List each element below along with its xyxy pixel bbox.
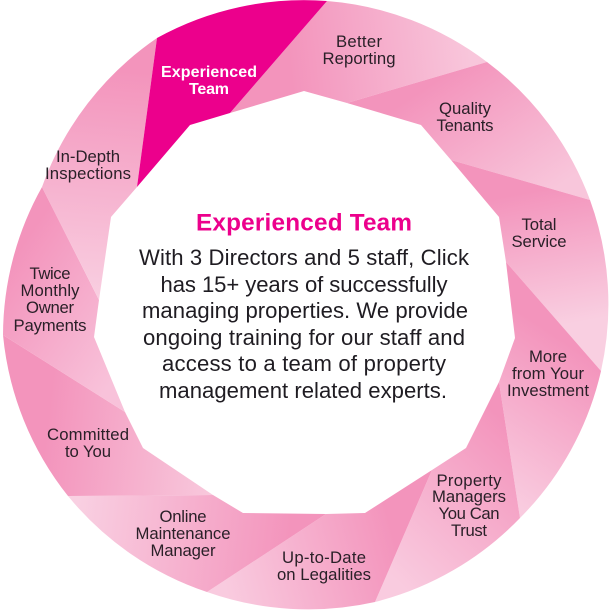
- label: More from Your Investment: from Your: [512, 364, 584, 383]
- label: Committed to You: Committed: [47, 425, 129, 444]
- segment: Up-to-Date on Legalities: [207, 470, 432, 609]
- segment: Better Reporting: [230, 1, 487, 113]
- segment: Twice Monthly Owner Payments: [3, 187, 125, 412]
- label: Twice Monthly Owner Payments: Owner: [26, 298, 74, 317]
- heading: Experienced Team: Experienced Team: [196, 210, 412, 236]
- label: Total Service: Service: [512, 232, 566, 251]
- label: Experienced Team: [161, 64, 257, 98]
- label: Online Maintenance Manager: Maintenance: [136, 524, 230, 543]
- body text: [139, 245, 470, 403]
- label: More from Your Investment: [507, 347, 589, 400]
- body text: has 15+ years of successfully: [160, 272, 448, 297]
- segment: Total Service: [451, 160, 608, 371]
- label: Property Managers You Can Trust: Managers: [432, 487, 506, 506]
- label: Experienced Team: Team: [189, 81, 229, 98]
- label: Twice Monthly Owner Payments: Monthly: [20, 281, 80, 300]
- label: Committed to You: [47, 425, 129, 461]
- label: Property Managers You Can Trust: Property: [436, 471, 502, 490]
- label: Committed to You: to You: [65, 442, 111, 461]
- label: In-Depth Inspections: [45, 147, 131, 183]
- label: In-Depth Inspections: Inspections: [45, 164, 131, 183]
- label: Property Managers You Can Trust: [432, 471, 506, 540]
- label: Better Reporting: [322, 32, 396, 68]
- label: Twice Monthly Owner Payments: Payments: [14, 316, 86, 335]
- label: Online Maintenance Manager: Manager: [150, 541, 216, 560]
- label: Online Maintenance Manager: [136, 507, 230, 560]
- label: Total Service: Total: [522, 215, 556, 234]
- label: Twice Monthly Owner Payments: Twice: [30, 264, 70, 283]
- body text: access to a team of property: [162, 351, 446, 376]
- label: Better Reporting: Reporting: [322, 49, 396, 68]
- body text: ongoing training for our staff and: [143, 325, 465, 350]
- body text: management related experts.: [159, 378, 447, 403]
- label: Quality Tenants: Tenants: [436, 116, 494, 135]
- label: Property Managers You Can Trust: You Can: [438, 504, 500, 523]
- segment: Quality Tenants: [347, 62, 590, 200]
- body text: managing properties. We provide: [142, 298, 468, 323]
- label: Online Maintenance Manager: Online: [160, 507, 206, 526]
- label: Up-to-Date on Legalities: [277, 548, 371, 584]
- body text: With 3 Directors and 5 staff, Click: [139, 245, 470, 270]
- label: Total Service: [512, 215, 566, 251]
- segment: Property Managers You Can Trust: [375, 382, 520, 602]
- label: Up-to-Date on Legalities: on Legalities: [277, 565, 371, 584]
- label: Experienced Team: Experienced: [161, 64, 257, 81]
- label: More from Your Investment: Investment: [507, 381, 589, 400]
- label: Property Managers You Can Trust: Trust: [451, 521, 487, 540]
- segment: Committed to You: [3, 335, 213, 496]
- label: Twice Monthly Owner Payments: [14, 264, 86, 335]
- label: In-Depth Inspections: In-Depth: [56, 147, 120, 166]
- segment: Experienced Team (active): [137, 0, 327, 187]
- segment: In-Depth Inspections: [42, 38, 157, 300]
- label: Up-to-Date on Legalities: Up-to-Date: [282, 548, 366, 567]
- label: Better Reporting: Better: [336, 32, 382, 51]
- segment: Online Maintenance Manager: [68, 495, 326, 592]
- label: Quality Tenants: [436, 99, 494, 135]
- label: More from Your Investment: More: [529, 347, 567, 366]
- segment: More from Your Investment: [499, 262, 601, 518]
- label: Quality Tenants: Quality: [439, 99, 492, 118]
